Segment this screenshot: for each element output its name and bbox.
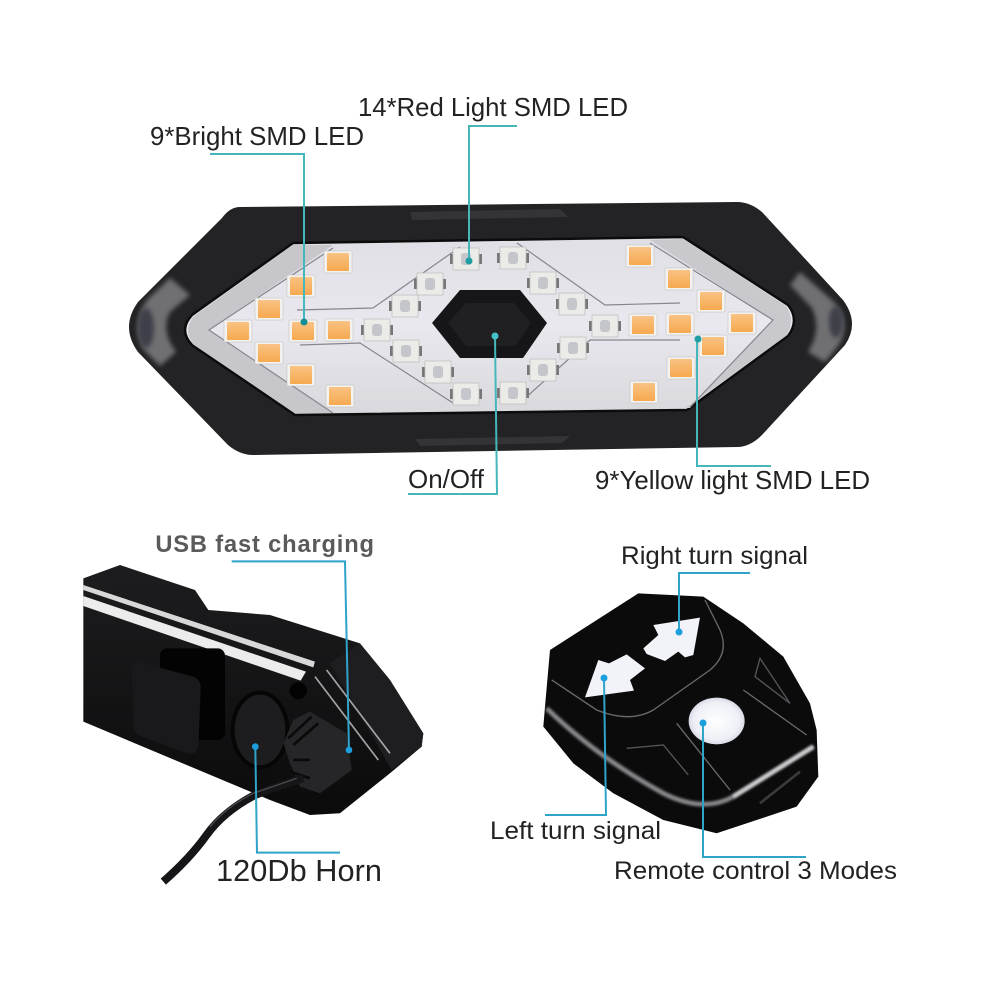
leader line xyxy=(697,339,771,466)
label: Right turn signal xyxy=(621,542,808,570)
leader line xyxy=(408,336,497,494)
panel: main tail light xyxy=(129,202,852,455)
label: Left turn signal xyxy=(490,817,661,845)
callout: right turn signal xyxy=(621,542,808,636)
panel: remote control xyxy=(543,593,818,833)
callout: on/off xyxy=(408,332,498,494)
right tip shading xyxy=(650,239,791,408)
cable xyxy=(163,778,303,882)
label: 9*Yellow light SMD LED xyxy=(595,465,870,495)
leader line xyxy=(469,126,517,261)
light body xyxy=(129,202,852,455)
mount slot xyxy=(160,648,225,740)
label: USB fast charging xyxy=(155,532,374,558)
callout: USB fast charging xyxy=(155,532,374,753)
hexagon inner detail xyxy=(448,303,531,346)
label: 14*Red Light SMD LED xyxy=(358,92,628,122)
left tip window xyxy=(138,308,154,348)
small hole xyxy=(290,682,307,699)
top strip xyxy=(410,209,568,220)
callout: 120Db Horn xyxy=(216,743,382,888)
right tip window xyxy=(829,306,843,338)
USB plug xyxy=(283,712,352,793)
callout: red light xyxy=(358,92,628,264)
slot on edge xyxy=(760,772,800,803)
label: Remote control 3 Modes xyxy=(614,857,897,885)
right translucent edge xyxy=(790,272,844,362)
side body xyxy=(83,565,423,815)
end face xyxy=(330,643,423,770)
leader line xyxy=(679,573,750,632)
leader line xyxy=(210,154,304,322)
hexagon power button xyxy=(432,290,547,358)
callout: yellow light xyxy=(595,336,870,495)
chevron guide lines xyxy=(209,243,773,413)
leader line xyxy=(232,561,349,750)
button surround xyxy=(552,600,807,790)
lower white stripe xyxy=(83,596,306,681)
label: On/Off xyxy=(408,464,485,494)
leader line xyxy=(545,678,606,815)
panel: side view with USB cable xyxy=(83,532,423,888)
upper white stripe xyxy=(83,585,315,667)
red SMD LEDs xyxy=(361,247,621,405)
right arrow button xyxy=(643,618,700,661)
contour strips xyxy=(315,670,390,760)
callout: left turn signal xyxy=(490,674,661,845)
mode button xyxy=(689,698,745,744)
bottom strip xyxy=(415,436,570,446)
lens panel xyxy=(185,237,794,415)
callout: bright LED xyxy=(150,121,364,326)
leader line xyxy=(255,747,340,853)
left translucent edge xyxy=(138,278,190,366)
yellow right arrow LEDs xyxy=(626,245,756,403)
label: 9*Bright SMD LED xyxy=(150,121,364,151)
lower bright highlight xyxy=(733,747,813,797)
triangle details xyxy=(627,658,790,775)
plug ribs xyxy=(288,717,318,778)
left tip shading xyxy=(188,245,333,413)
horn disc xyxy=(233,693,287,767)
rubber pad xyxy=(132,662,201,754)
left arrow button xyxy=(585,654,645,697)
remote body xyxy=(543,593,818,833)
cable highlight xyxy=(210,778,297,827)
callout: remote control modes xyxy=(614,720,897,885)
lower edge highlight xyxy=(547,708,813,804)
yellow left arrow LEDs xyxy=(224,251,354,407)
leader line xyxy=(703,723,806,857)
label: 120Db Horn xyxy=(216,854,382,888)
